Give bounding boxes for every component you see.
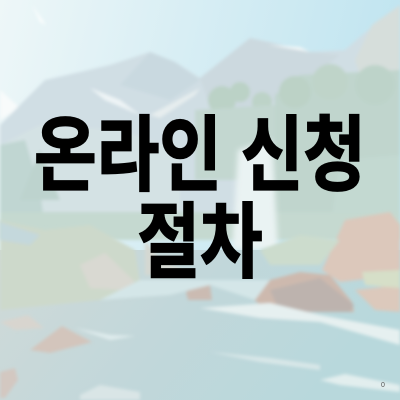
title line 2: 절차 xyxy=(137,197,263,289)
small mark: 0 xyxy=(381,382,385,389)
waterfall xyxy=(232,140,278,250)
title line 1: 온라인 신청 xyxy=(34,110,366,202)
